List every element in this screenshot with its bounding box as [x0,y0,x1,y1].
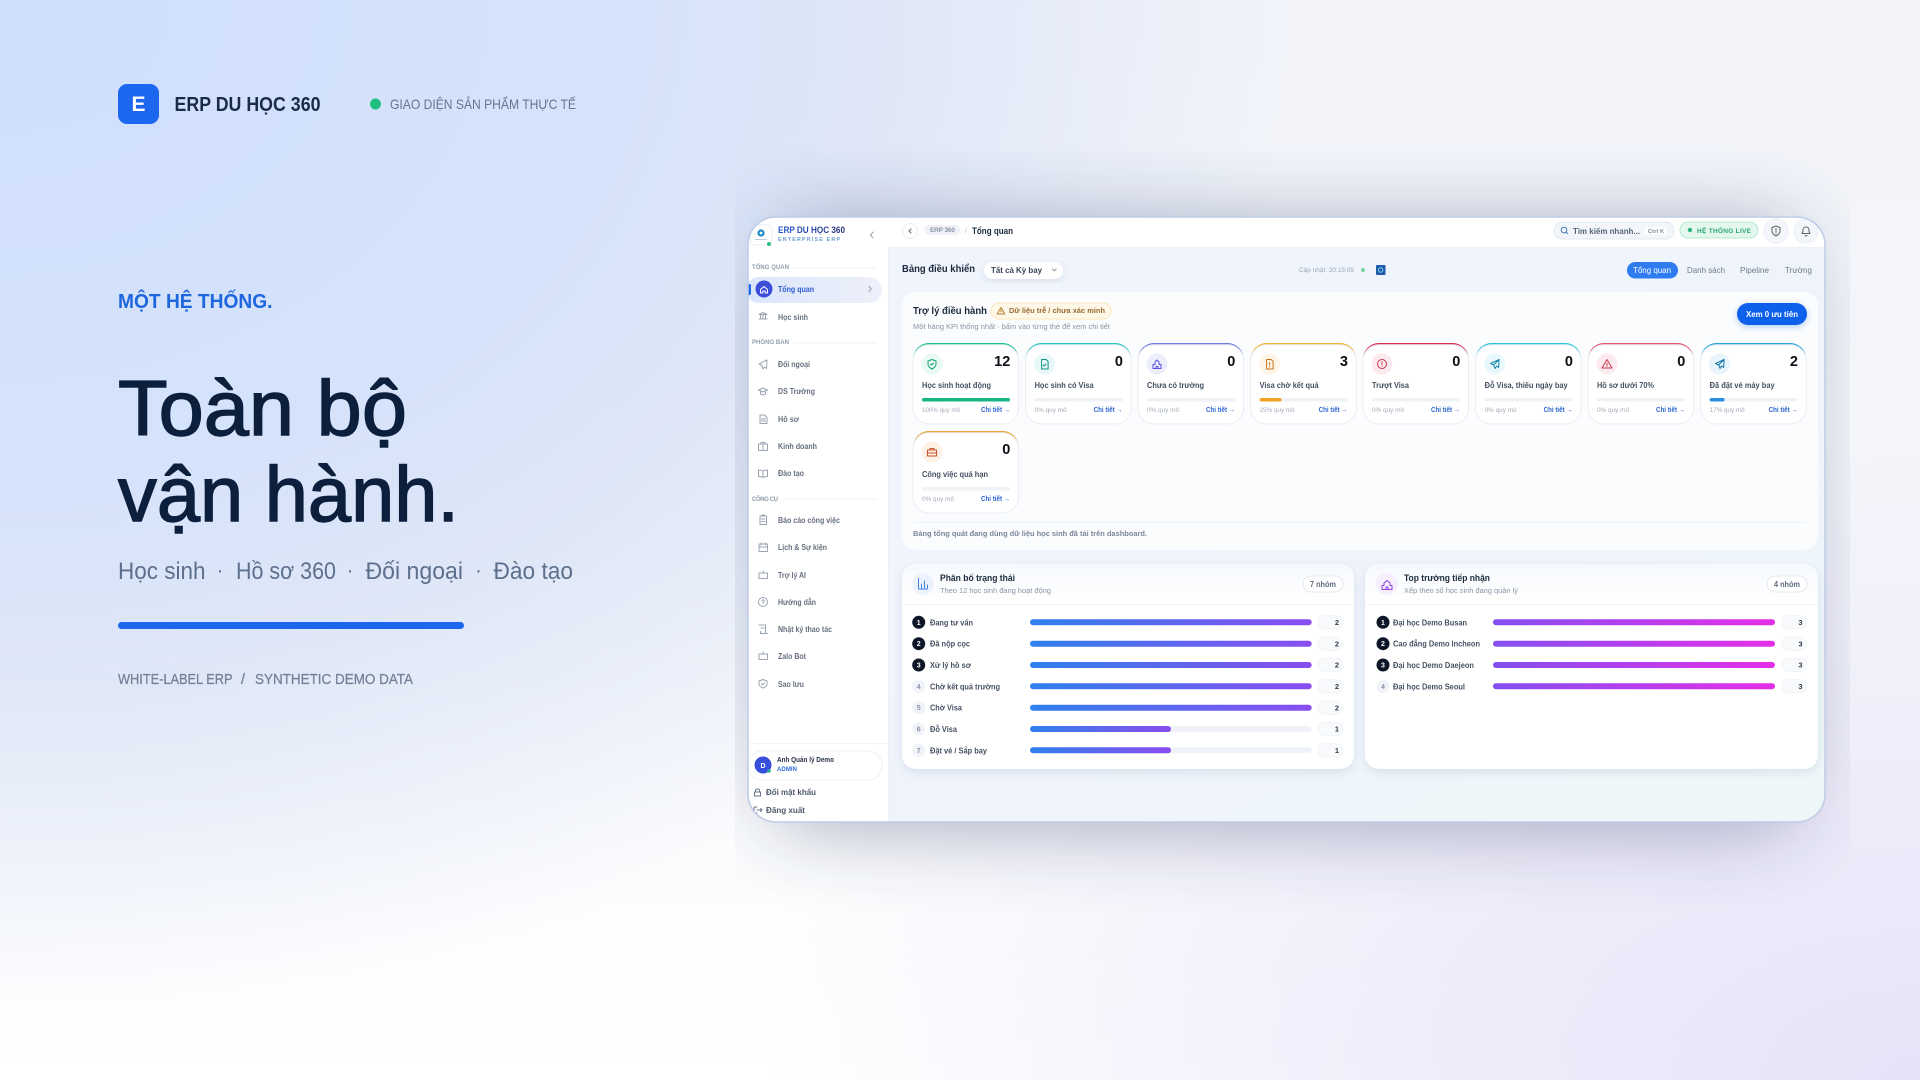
subtitle: Đào tạo [494,558,573,585]
KPI card: flight tickets booked: 17% quy mô [1710,407,1745,414]
panel title: Phân bố trạng thái [940,573,1015,584]
subtitle [118,558,573,585]
KPI card: visa awaiting result: 25% quy mô [1260,407,1295,414]
group count badge: 7 nhóm [1310,580,1336,589]
nav: Báo cáo công việc: Báo cáo công việc [778,515,840,525]
nav: Hồ sơ: Hồ sơ [778,414,799,424]
nav: Sao lưu: Sao lưu [778,679,804,689]
accent bar [118,622,464,629]
nav: Hồ sơ [760,414,799,424]
row: Chờ kết quả trường: 4 [917,684,921,691]
row: Đang tư vấn: 1 [917,620,921,627]
view tabs [1627,262,1812,278]
KPI card: visa awaiting result [1251,343,1356,424]
nav: Lịch & Sự kiện: Lịch & Sự kiện [778,542,827,552]
nav: Lịch & Sự kiện [759,542,827,552]
bell button [1794,219,1818,243]
KPI card: overdue work: Công việc quá hạn [922,470,988,479]
KPI card: visa refused [1363,343,1469,424]
KPI card: flight tickets booked [1701,343,1806,424]
row: Xử lý hồ sơ: Xử lý hồ sơ [930,661,971,670]
KPI card: students with visa: Chi tiết → [1094,406,1123,414]
search box [1554,222,1674,239]
view tabs: Trường [1785,265,1812,275]
nav: Kinh doanh: Kinh doanh [778,441,817,451]
product tag: GIAO DIỆN SẢN PHẨM THỰC TẾ [390,95,576,112]
KPI card: visa refused: Trượt Visa [1372,381,1409,390]
row: Daejeon: 3 [1798,661,1802,670]
KPI card: active students [913,343,1019,424]
row: Đặt vé / Sắp bay: 7 [917,748,921,755]
row: Incheon: 3 [1798,639,1802,648]
view tabs: Tổng quan [1633,265,1671,275]
row: Xử lý hồ sơ: 3 [917,662,921,670]
KPI card: visa passed, no flight date: Chi tiết → [1544,406,1573,414]
row: Đỗ Visa: 6 [917,726,921,734]
row: Busan: 1 [1381,620,1385,627]
row: Busan: 3 [1798,618,1802,627]
nav: Sao lưu [759,679,804,689]
panel title: Top trường tiếp nhận [1404,573,1490,584]
logout link: Đăng xuất [766,805,805,815]
window shadow [775,228,1798,824]
KPI card: no school yet: Chi tiết → [1206,406,1235,414]
footer tag: SYNTHETIC DEMO DATA [255,672,413,688]
group count badge [1303,576,1343,592]
dashboard title: Bảng điều khiển [902,263,975,275]
brand name: ERP DU HỌC 360 [174,94,320,116]
nav: Zalo Bot [758,652,806,660]
KPI card: students with visa: 0% quy mô [1035,407,1067,414]
KPI card: students with visa [1026,343,1131,424]
bar chart: schools [1376,616,1807,693]
KPI card: no school yet: 0% quy mô [1147,407,1180,414]
KPI card: visa awaiting result: Visa chờ kết quả [1260,381,1319,390]
KPI card: file under 70 percent: Hồ sơ dưới 70% [1597,381,1654,390]
KPI card: active students: 12 [994,354,1010,370]
KPI card: file under 70 percent: 0% quy mô [1597,407,1630,414]
row: Đã nộp cọc [912,637,1343,650]
row: Đã nộp cọc: 2 [1335,639,1339,648]
logo tile [118,84,159,124]
row: Daejeon: 3 [1381,662,1385,670]
data warning badge: Dữ liệu trễ / chưa xác minh [1009,306,1105,315]
row: Xử lý hồ sơ [912,658,1343,672]
KPI card: visa refused: Chi tiết → [1431,406,1460,414]
dashboard screenshot window [746,217,1825,822]
nav: Trợ lý AI: Trợ lý AI [778,570,806,580]
search box: Tìm kiếm nhanh... [1573,227,1640,236]
panel: sidebar: PHÒNG BAN [752,338,789,346]
panel: executive assistant [902,292,1818,550]
KPI card: visa passed, no flight date: 0 [1565,354,1573,370]
breadcrumb: ERP 360 [930,227,955,234]
KPI card: no school yet: 0 [1227,354,1235,370]
KPI card: visa passed, no flight date [1476,343,1581,424]
change password link: Đổi mật khẩu [766,787,816,797]
user card: ADMIN [777,767,797,773]
nav: Học sinh [759,312,808,322]
sidebar logo [750,225,772,246]
row: Seoul [1376,680,1807,693]
row: Chờ kết quả trường [912,680,1343,693]
subtitle: Hồ sơ 360 [236,558,336,585]
search box: Ctrl K [1648,229,1664,235]
KPI card: visa refused: 0% quy mô [1372,407,1405,414]
row: Incheon: Cao đẳng Demo Incheon [1393,640,1480,649]
shield button [1764,219,1788,243]
nav: Zalo Bot: Zalo Bot [778,651,806,661]
nav: Đối ngoại: Đối ngoại [778,359,810,369]
data warning badge [991,303,1111,319]
priority button [1737,303,1807,325]
nav: Nhật ký thao tác [759,624,832,634]
row: Busan: Đại học Demo Busan [1393,618,1467,627]
panel subtitle: Theo 12 học sinh đang hoạt động [940,586,1051,595]
subtitle: · [217,560,223,582]
KPI card: file under 70 percent: 0 [1677,354,1685,370]
panel: sidebar [746,217,888,822]
active nav item: Tổng quan [778,284,814,294]
footer tag: WHITE-LABEL ERP [118,672,232,688]
sidebar brand [778,226,845,241]
KPI card: file under 70 percent: Chi tiết → [1656,406,1685,414]
updated time: Cập nhật: 20:15:09 [1299,267,1354,274]
eyebrow: MỘT HỆ THỐNG. [118,289,272,313]
row: Busan [1376,616,1807,629]
nav: Đối ngoại [759,359,810,369]
KPI card: flight tickets booked: Chi tiết → [1769,406,1798,414]
nav: Hướng dẫn: Hướng dẫn [778,597,816,607]
toolbar [902,262,1812,279]
panel subtitle: Một hàng KPI thống nhất · bấm vào từng thẻ để xem chi tiết [913,322,1111,331]
nav: Đào tạo [758,470,804,478]
sidebar brand: ERP DU HỌC 360 [778,225,845,236]
headline: Toàn bộ [118,364,407,452]
logout link [754,806,805,814]
row: Đỗ Visa: 1 [1335,725,1339,734]
user card: Anh Quản lý Demo [777,757,834,764]
refresh button [1376,265,1386,275]
KPI card: no school yet: Chưa có trường [1147,381,1204,390]
user card [748,751,882,780]
term select: Tất cả Kỳ bay [991,266,1043,275]
panel: top bar [888,217,1825,248]
system live badge [1680,222,1758,238]
KPI card: overdue work: 0% quy mô [922,496,955,503]
footer tag [118,672,413,688]
nav: Đào tạo: Đào tạo [778,468,804,478]
row: Đang tư vấn [912,616,1343,629]
KPI card: students with visa: Học sinh có Visa [1035,381,1094,390]
row: Seoul: 4 [1381,684,1385,691]
KPI card: active students: Chi tiết → [981,406,1010,414]
row: Chờ Visa [912,701,1343,714]
active nav item [746,277,882,303]
subtitle: Đối ngoại [366,558,463,585]
row: Chờ Visa: Chờ Visa [930,704,963,713]
KPI card: overdue work: 0 [1002,442,1010,458]
KPI card: visa awaiting result: 3 [1340,354,1348,370]
nav: Nhật ký thao tác: Nhật ký thao tác [778,624,832,634]
row: Đỗ Visa [912,722,1343,736]
nav: Báo cáo công việc [760,515,840,525]
back button [902,224,918,238]
nav: DS Trường [758,388,815,396]
row: Đang tư vấn: Đang tư vấn [930,618,973,627]
status dot [370,98,381,110]
nav: Trợ lý AI [758,570,806,580]
KPI card: active students: 100% quy mô [922,407,960,414]
panel subtitle: Xếp theo số học sinh đang quản lý [1404,586,1518,595]
logo tile: E [131,93,146,116]
panel: sidebar: TỔNG QUAN [752,264,789,271]
system live badge: HỆ THỐNG LIVE [1697,225,1752,235]
panel: status distribution [902,564,1354,769]
row: Chờ Visa: 2 [1335,703,1339,712]
group count badge: 4 nhóm [1774,580,1800,589]
nav: Hướng dẫn [758,597,816,607]
KPI card: overdue work [913,431,1019,513]
panel: top receiving schools [1365,564,1818,769]
row: Seoul: 3 [1798,682,1802,691]
panel icon [912,573,934,595]
row: Đặt vé / Sắp bay: Đặt vé / Sắp bay [930,746,988,755]
nav: DS Trường: DS Trường [778,386,815,396]
sidebar brand: ENTERPRISE ERP [778,237,840,243]
subtitle: · [475,560,482,582]
nav: Kinh doanh [758,441,817,451]
KPI card: overdue work: Chi tiết → [981,495,1010,503]
brand header [118,84,576,124]
change password link [754,788,816,796]
nav: Học sinh: Học sinh [778,312,808,322]
row: Đỗ Visa: Đỗ Visa [930,725,958,734]
priority button: Xem 0 ưu tiên [1746,310,1798,319]
row: Đã nộp cọc: Đã nộp cọc [930,640,971,649]
row: Daejeon: Đại học Demo Daejeon [1393,661,1474,670]
panel: sidebar: CÔNG CỤ [752,495,778,503]
row: Daejeon [1376,658,1807,672]
breadcrumb: / [965,228,967,235]
breadcrumb: Tổng quan [972,226,1013,236]
row: Chờ Visa: 5 [917,705,921,712]
view tabs: Pipeline [1740,265,1769,275]
row: Incheon [1376,637,1807,650]
KPI card: flight tickets booked: 2 [1790,354,1798,370]
user card: D [760,763,766,770]
bar chart: status [912,616,1343,757]
group count badge [1767,576,1807,592]
row: Chờ kết quả trường: Chờ kết quả trường [930,682,1000,691]
row: Seoul: Đại học Demo Seoul [1393,682,1465,691]
subtitle: Học sinh [118,558,206,585]
view tabs: Danh sách [1687,265,1725,275]
panel icon [1376,573,1398,595]
KPI card: visa passed, no flight date: 0% quy mô [1485,407,1517,414]
panel footnote: Bảng tổng quát đang dùng dữ liệu học sinh đã tải trên dashboard. [913,529,1147,538]
row: Xử lý hồ sơ: 2 [1335,661,1339,670]
KPI card: file under 70 percent [1588,343,1694,424]
row: Incheon: 2 [1381,641,1385,648]
row: Chờ kết quả trường: 2 [1335,682,1339,691]
KPI card: students with visa: 0 [1115,354,1123,370]
row: Đang tư vấn: 2 [1335,618,1339,627]
KPI card: visa refused: 0 [1452,354,1460,370]
KPI card: no school yet [1138,343,1244,424]
KPI card: flight tickets booked: Đã đặt vé máy bay [1710,381,1775,390]
KPI card: visa passed, no flight date: Đỗ Visa, thiếu ngày bay [1485,381,1568,390]
KPI card: visa awaiting result: Chi tiết → [1319,406,1348,414]
KPI card: active students: Học sinh hoạt động [922,381,991,390]
footer tag: / [241,672,246,688]
row: Đặt vé / Sắp bay: 1 [1335,746,1339,755]
headline: vận hành. [118,450,459,538]
headline [118,364,459,538]
panel heading: Trợ lý điều hành [913,305,987,317]
subtitle: · [347,560,353,582]
breadcrumb [924,225,1013,236]
row: Đặt vé / Sắp bay [912,744,1343,757]
row: Đã nộp cọc: 2 [917,641,921,648]
term select [984,262,1063,279]
